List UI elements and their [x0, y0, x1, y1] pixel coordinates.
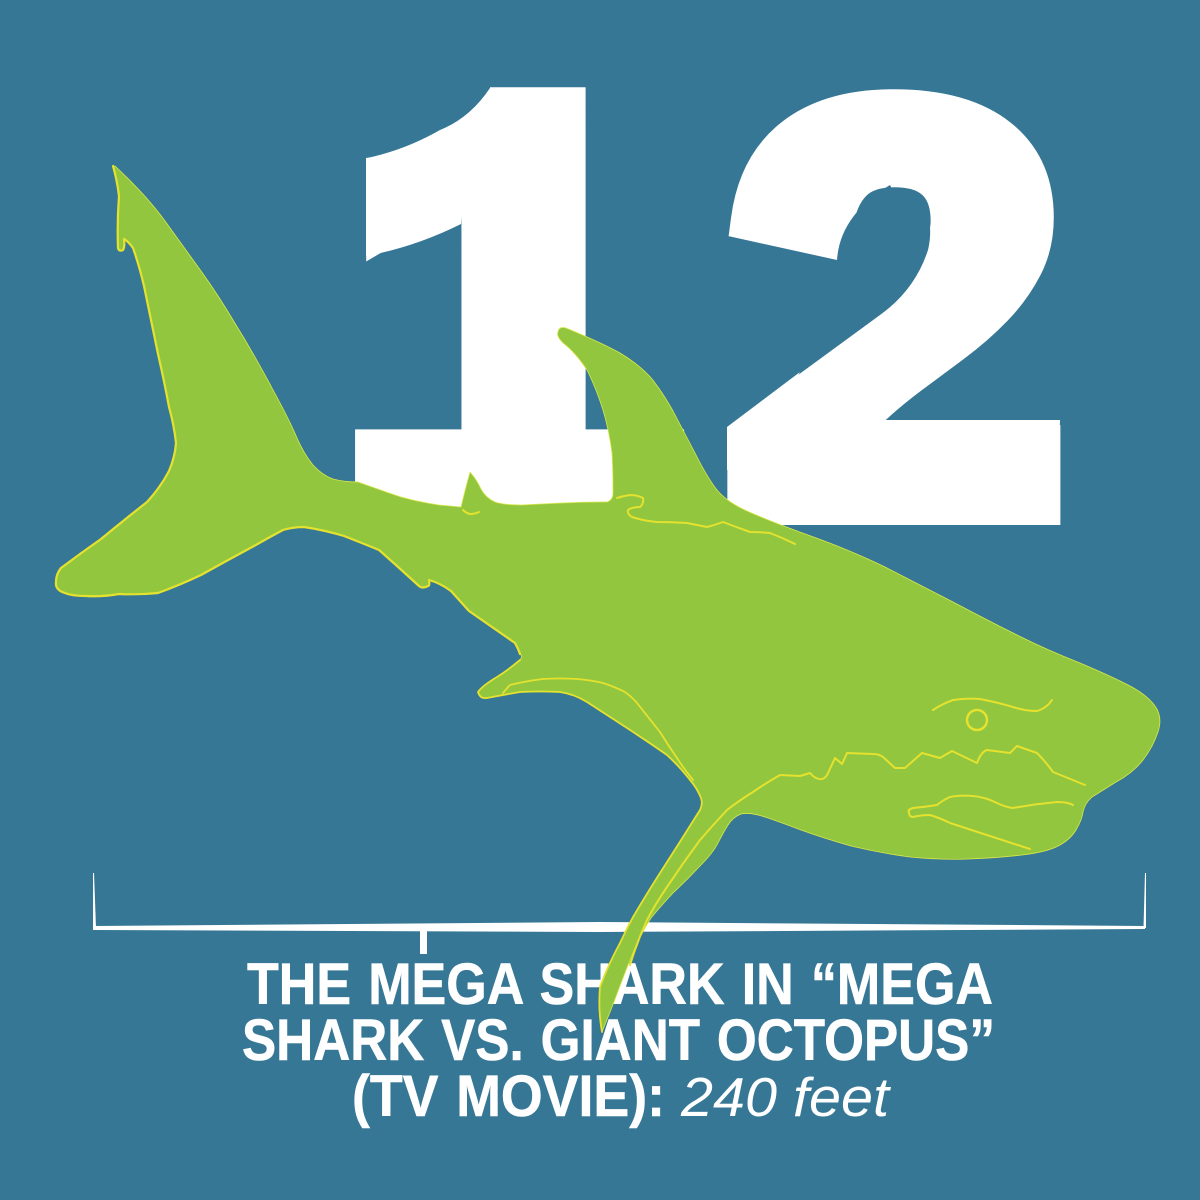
- yellow outline: pectoral fin edge: [478, 660, 702, 1032]
- shark illustration: [56, 166, 1160, 1032]
- caption: (TV MOVIE):: [352, 1064, 665, 1129]
- shark body: [56, 166, 1160, 1032]
- caption: THE MEGA SHARK IN “MEGA: [247, 952, 993, 1017]
- shark brow: [933, 699, 1052, 711]
- rank number 12: [335, 0, 1066, 632]
- caption: 240 feet: [680, 1066, 892, 1128]
- shark eye: [967, 710, 987, 730]
- scale ruler: [93, 873, 1146, 954]
- small fin mark: [463, 510, 479, 514]
- dorsal fin base line: [617, 495, 795, 544]
- rank number 12: 2: [725, 0, 1066, 629]
- pectoral fin inner line: [503, 678, 693, 780]
- caption: SHARK VS. GIANT OCTOPUS”: [242, 1008, 995, 1073]
- gill and lower fin line: [630, 746, 1085, 965]
- caption: [242, 952, 995, 1129]
- yellow outline: tail and belly: [56, 166, 520, 654]
- shark mouth: [908, 796, 1073, 849]
